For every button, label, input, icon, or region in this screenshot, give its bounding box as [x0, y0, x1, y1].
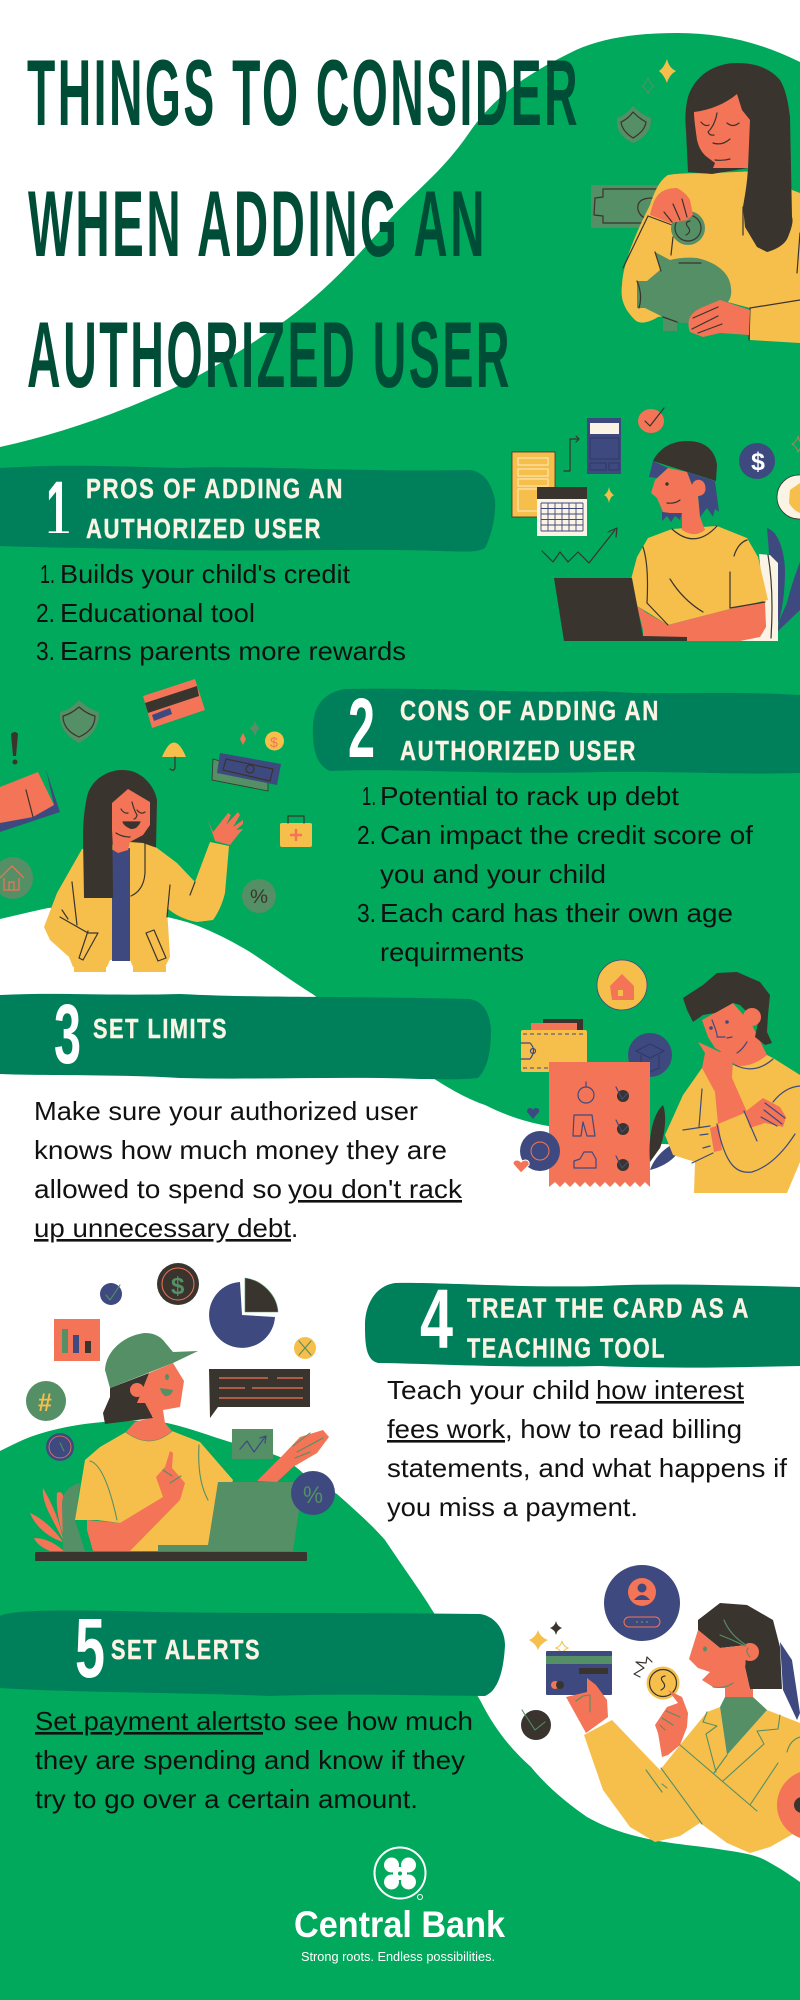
panel: set limits: [0, 987, 491, 1243]
set alerts text: Set payment alerts: [35, 1706, 263, 1736]
hair: [698, 1603, 782, 1689]
pros list: Earns parents more rewards: [60, 636, 406, 666]
sparkles: [529, 1621, 568, 1655]
hair: [683, 972, 772, 1045]
jacket hems: [74, 966, 166, 972]
icon: dollar circle: $: [171, 1273, 185, 1300]
pointing hand: [655, 1690, 688, 1757]
banner 1: [0, 466, 495, 552]
set limits text: up unnecessary debt: [34, 1213, 292, 1243]
pros list: 2.: [36, 598, 55, 628]
icon: dollar circle: [157, 1263, 199, 1305]
yellow sparkle: [604, 487, 614, 503]
set alerts text: try to go over a certain amount.: [35, 1784, 418, 1814]
icon: outline sparkle: [642, 78, 654, 94]
apple icon: [578, 1082, 594, 1103]
panel: set alerts: [0, 1601, 505, 1814]
number 4: 4: [420, 1272, 453, 1366]
face features: [709, 1020, 747, 1053]
ear: [743, 1008, 761, 1026]
cons list: Potential to rack up debt: [380, 781, 680, 811]
icon: percent circle: [291, 1471, 335, 1515]
shirt: [629, 526, 768, 625]
face: [689, 1630, 753, 1697]
face and neck: [112, 789, 150, 853]
leaves: [650, 1105, 686, 1170]
neck and face: [126, 1363, 184, 1441]
zigzag chart arrow: [542, 528, 617, 563]
heading 4: TEACHING TOOL: [467, 1332, 666, 1364]
background: upper green wave: [0, 33, 800, 1150]
neck and face: [651, 468, 706, 534]
heading 2: CONS OF ADDING AN: [400, 695, 660, 726]
number 5: 5: [75, 1601, 105, 1695]
tagline: Strong roots. Endless possibilities.: [301, 1949, 495, 1964]
pros list: [36, 559, 406, 666]
icon: banknote: [591, 185, 663, 228]
icon: clock: [46, 1433, 74, 1461]
icon: wallet: [521, 1019, 587, 1072]
cons list: Each card has their own age: [380, 898, 733, 928]
teaching tool text: Teach your child: [387, 1375, 590, 1405]
heading 1: AUTHORIZED USER: [86, 513, 322, 544]
hair: [685, 63, 793, 252]
forearm and hand: [710, 1098, 786, 1152]
illustration: man at laptop: [512, 408, 800, 641]
icon: credit card: [143, 679, 205, 728]
cons list: [357, 781, 754, 967]
jacket lines: [60, 843, 195, 961]
face: [694, 94, 750, 168]
ponytail: [780, 1642, 800, 1720]
icon: house circle: [597, 960, 647, 1010]
jacket lines: [646, 1712, 800, 1824]
set alerts text: they are spending and know if they: [35, 1745, 465, 1775]
hand holding pig: [688, 300, 750, 337]
navy leaves: [767, 528, 800, 632]
icon: coral heart: [513, 1160, 529, 1173]
pros list: 3.: [36, 636, 55, 666]
icon: dollar circle: $: [751, 448, 765, 476]
icon: check badge: [638, 408, 664, 433]
icon: bar chart: [54, 1319, 100, 1361]
icon: exclamation: [11, 732, 18, 764]
inner shirt: [112, 848, 130, 961]
hand holding card: [566, 1678, 608, 1733]
pants icon: [573, 1115, 595, 1136]
teaching tool text: [387, 1375, 788, 1522]
jacket: [44, 842, 229, 967]
title: [27, 40, 580, 407]
icon: small chart card: [232, 1429, 273, 1459]
right forearm to hand: [257, 1430, 329, 1482]
illustration: woman with piggy bank: [591, 59, 800, 343]
icon: shield badge: [777, 475, 800, 519]
icon: banknotes: [212, 753, 281, 791]
laptop: [158, 1482, 299, 1551]
set alerts text: to see how much: [263, 1706, 473, 1736]
banner 5: [0, 1611, 505, 1696]
icon: percent circle: %: [303, 1482, 323, 1509]
set limits text: [34, 1096, 463, 1243]
icon: umbrella: [162, 742, 186, 770]
shirt: [665, 1055, 800, 1193]
icon: house circle: [0, 857, 33, 899]
piggy bank: [637, 252, 731, 331]
set limits text: knows how much money they are: [34, 1135, 447, 1165]
heading 2: [400, 695, 660, 766]
ear: [130, 1383, 144, 1397]
laptop: [554, 578, 687, 641]
cons list: 1.: [362, 781, 376, 811]
ear: [741, 1643, 759, 1661]
teaching tool text: you miss a payment.: [387, 1492, 638, 1522]
face features: [116, 802, 145, 837]
coral leaves: [30, 1488, 64, 1551]
scribble: [634, 1657, 652, 1677]
pros list: Educational tool: [60, 598, 255, 628]
pointing arm: [87, 1451, 185, 1551]
hand dropping coin: [650, 188, 693, 223]
face details: [703, 1620, 750, 1688]
icon: close circle: [294, 1337, 316, 1359]
back hair: [83, 770, 157, 898]
banner 3: [0, 994, 491, 1079]
background: lower green wave: [0, 1421, 800, 2000]
number 3: 3: [54, 987, 81, 1081]
logo: Central Bank: [294, 1848, 505, 1964]
illustration: thinking man with receipt: [513, 960, 800, 1193]
panel: cons: [313, 681, 800, 967]
heading 3: SET LIMITS: [93, 1013, 228, 1044]
sage chair: [62, 1483, 85, 1551]
icon: coin: $: [270, 734, 278, 750]
set limits text: allowed to spend so: [34, 1174, 282, 1204]
sage blouse: [720, 1697, 767, 1755]
icon: dollar circle: [739, 443, 775, 479]
icon: navy heart: [527, 1108, 539, 1119]
icon: percent circle: %: [250, 887, 268, 908]
banner 4: [365, 1283, 800, 1368]
pros list: Builds your child's credit: [60, 559, 351, 589]
forearm: [637, 602, 766, 641]
heading 1: PROS OF ADDING AN: [86, 473, 344, 504]
coin: [646, 1666, 680, 1700]
cons list: Can impact the credit score of: [380, 820, 754, 850]
cons list: 3.: [357, 898, 376, 928]
cons list: requirments: [380, 937, 524, 967]
icon: baby circle: [520, 1131, 560, 1171]
jacket: [584, 1707, 800, 1853]
credit card: [546, 1651, 612, 1695]
icon: book: [0, 770, 60, 832]
icon: clock: [521, 1710, 551, 1740]
set alerts text: [35, 1706, 473, 1814]
cons list: 2.: [357, 820, 376, 850]
navy hair: [649, 461, 719, 522]
coral circle: [777, 1770, 800, 1840]
face features: [160, 1374, 173, 1396]
icon: hash circle: [26, 1381, 66, 1421]
chair: [740, 554, 778, 641]
heading 2: AUTHORIZED USER: [400, 735, 637, 766]
icon: percent circle: [242, 879, 276, 913]
teaching tool text: fees work: [387, 1414, 506, 1444]
icon: calendar: [537, 487, 587, 536]
arrow connector: [564, 436, 579, 471]
sweater: [622, 170, 800, 343]
icon: clover ring: [374, 1848, 426, 1900]
panel: pros: [0, 464, 495, 666]
panel: treat the card as a teaching tool: [365, 1272, 800, 1522]
number 2: 2: [348, 681, 375, 775]
icon: form: [512, 452, 555, 517]
icon: shield: [617, 106, 651, 143]
face: [702, 1003, 767, 1066]
shirt lines: [643, 526, 772, 638]
beanie: [653, 441, 717, 481]
icon: check circle: [100, 1283, 122, 1305]
heading 1: [86, 473, 344, 544]
speech bubble: [209, 1369, 310, 1418]
arm: [698, 1042, 747, 1124]
icon: calculator: [587, 418, 621, 474]
heading 4: [467, 1292, 750, 1364]
teaching tool text: how interest: [596, 1375, 745, 1405]
cap: [105, 1333, 198, 1388]
face features: [701, 113, 739, 160]
check marks: [616, 1087, 629, 1171]
sweater lines: [623, 207, 800, 340]
set limits text: you don't rack: [288, 1174, 463, 1204]
icon: graduation cap circle: [628, 1033, 672, 1077]
number 1: 1: [46, 464, 70, 558]
teaching tool text: , how to read billing: [505, 1414, 742, 1444]
face features: [665, 482, 680, 503]
icon: receipt: [549, 1062, 650, 1187]
illustration: woman with credit card: [521, 1565, 800, 1853]
icon: sparkles: [240, 720, 260, 745]
icon: shield: [60, 700, 99, 743]
shirt lines: [683, 1059, 800, 1172]
pros list: 1.: [40, 559, 55, 589]
shirt lines: [90, 1431, 208, 1520]
icon: profile circle: [604, 1565, 680, 1641]
icon: medkit: [280, 816, 312, 847]
banner 2: [313, 689, 800, 774]
hand on chin and arm: [698, 1003, 786, 1152]
shirt: [75, 1431, 233, 1551]
waving hand: [208, 812, 243, 845]
cons list: you and your child: [380, 859, 606, 889]
set limits text: Make sure your authorized user: [34, 1096, 418, 1126]
teaching tool text: statements, and what happens if: [387, 1453, 788, 1483]
hair: [103, 1373, 153, 1424]
icon: yellow sparkle: [659, 59, 676, 83]
heading 5: SET ALERTS: [111, 1634, 261, 1665]
set limits text: .: [291, 1213, 298, 1243]
outline sparkle: [792, 436, 800, 452]
desk: [35, 1552, 307, 1561]
wordmark: Central Bank: [294, 1904, 505, 1945]
car icon: [574, 1152, 596, 1168]
pie chart: [209, 1278, 278, 1348]
illustration: person with cap and charts: [26, 1263, 335, 1561]
icon: coin: [671, 211, 705, 245]
icon: hash circle: #: [38, 1389, 52, 1417]
illustration: woman with floating icons: [0, 679, 312, 972]
front hair: [83, 797, 113, 898]
icon: coin: [265, 732, 284, 750]
